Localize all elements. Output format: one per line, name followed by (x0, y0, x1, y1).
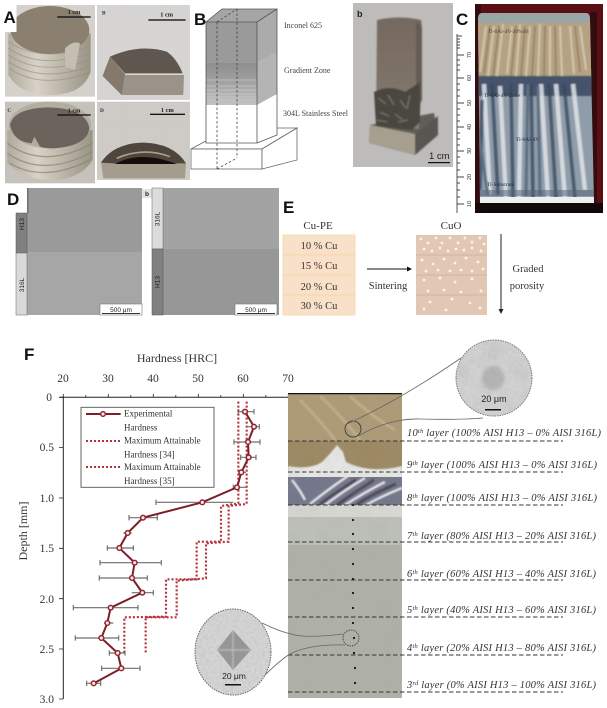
right micrograph: 316L (154, 211, 162, 226)
label: 10th layer: th (418, 428, 423, 435)
porous CuO stack (416, 235, 487, 315)
ruler: 50 (467, 100, 473, 106)
photo b: printed column on base: b (357, 9, 363, 19)
y axis: 0 (46, 392, 52, 404)
label: 5th layer: 5 (407, 605, 412, 616)
left micrograph (16, 188, 142, 315)
heading letter C: C (456, 10, 468, 29)
legend: Hardness (124, 423, 158, 433)
legend: Experimental (124, 408, 173, 418)
label: 6th layer: th (412, 569, 418, 576)
ruler: 60 (467, 75, 473, 81)
photo B: sectioned sample (97, 5, 190, 100)
label Graded porosity (510, 264, 545, 292)
y axis: 3.0 (40, 694, 54, 706)
stack of Cu-PE layers (283, 235, 355, 315)
y axis: 1.0 (40, 493, 54, 505)
ruler: 70 (467, 52, 473, 58)
sub-label b (142, 189, 152, 198)
label: 4th layer: th (412, 643, 418, 650)
callout: top indentation detail: 20 μm (481, 394, 507, 404)
x axis: 70 (282, 373, 294, 385)
x axis: 60 (237, 373, 249, 385)
label: 9th layer: layer (100% AISI H13 – 0% AISI 316L) (418, 460, 598, 471)
rough band (374, 82, 420, 130)
substrate base (191, 128, 297, 169)
ruler (457, 34, 473, 213)
photo D: section of cylinder: D (100, 108, 104, 114)
panel F heading letter: F (24, 345, 34, 364)
panel B: graded block schematic (191, 9, 349, 169)
legend: Hardness [35] (124, 476, 175, 486)
dotted line: maximum attainable hardness 35 (146, 402, 247, 653)
label: 3rd layer: rd (412, 680, 419, 687)
label: 9th layer: 9 (407, 460, 412, 471)
x axis: 20 (57, 373, 69, 385)
label: Inconel 625: Inconel 625 (284, 21, 322, 30)
experimental hardness curve (91, 409, 256, 686)
ruler: 10 (467, 201, 473, 207)
panel C: ruler and etched cross-section (456, 4, 603, 213)
label Cu-PE: Cu-PE (303, 220, 333, 232)
x axis: 30 (102, 373, 114, 385)
photo A: graded cylinder (5, 5, 95, 97)
left micrograph: 316L (19, 277, 26, 292)
right micrograph: H13 (154, 276, 162, 288)
x axis: 40 (147, 373, 159, 385)
label: 3rd layer: 3 (407, 680, 412, 691)
label: 3rd layer: layer (0% AISI H13 – 100% AISI 316L) (418, 680, 596, 691)
stack of Cu-PE layers: 10 % Cu (301, 241, 338, 252)
heading letter D: D (7, 190, 19, 209)
photo B: sectioned sample: B (102, 11, 106, 17)
heading letter B: B (194, 10, 206, 29)
etched sample photo (475, 4, 603, 213)
label: 8th layer: 8 (407, 493, 412, 504)
photo C: top view of cylinder (5, 102, 95, 183)
label Graded porosity: Graded (513, 264, 544, 275)
callout: top indentation detail (345, 340, 532, 437)
scale box: 500 μm (110, 307, 132, 314)
scale bar: 1 cm (68, 107, 81, 114)
photo b: printed column on base (353, 3, 453, 167)
heading letter D (6, 190, 22, 212)
y axis title: Depth [mm] (16, 502, 30, 560)
photo C: top view of cylinder: C (7, 108, 11, 114)
etched sample photo: Ti-6Al-4V (516, 137, 539, 143)
etched sample photo: Ti-6Al-4V-20%SS (488, 29, 529, 35)
stack of Cu-PE layers: 30 % Cu (301, 301, 338, 312)
panel D: micrographs of H13 and 316L (6, 188, 279, 315)
label Graded porosity: porosity (510, 281, 545, 292)
dashed layer boundaries (288, 441, 563, 692)
scale bar: 1 cm (68, 9, 81, 16)
ruler: 40 (467, 124, 473, 130)
legend: Maximum Attainable (124, 436, 201, 446)
block drawing (191, 9, 297, 169)
legend: Hardness [34] (124, 449, 175, 459)
etched sample photo: Ti-Substrate (487, 182, 515, 188)
column (376, 18, 422, 129)
arrow: sintering: Sintering (369, 281, 408, 292)
label: 7th layer: layer (80% AISI H13 – 20% AISI 316L) (418, 531, 596, 542)
panel A: four photographs of printed samples (5, 5, 190, 183)
label: 7th layer: th (412, 531, 418, 538)
label: 7th layer: 7 (407, 531, 412, 542)
indentation dots (352, 504, 356, 684)
label: 8th layer: layer (100% AISI H13 – 0% AISI 316L) (418, 493, 598, 504)
label CuO: CuO (441, 220, 461, 232)
scale box: 500 μm (245, 307, 267, 314)
callout: bottom indentation detail: 20 μm (222, 671, 246, 681)
panel F: hardness chart (16, 351, 294, 706)
legend: Maximum Attainable (124, 462, 201, 472)
label: 8th layer: th (412, 493, 418, 500)
label: 10th layer: layer (100% AISI H13 – 0% AISI 316L) (423, 428, 602, 439)
heading letter E: E (283, 198, 294, 217)
photo D: section of cylinder (97, 102, 190, 180)
scale bar: 1 cm (160, 12, 174, 19)
label: Gradient Zone: Gradient Zone (284, 66, 331, 75)
label: 5th layer: layer (40% AISI H13 – 60% AISI 316L) (418, 605, 596, 616)
x axis: 50 (192, 373, 204, 385)
y axis (40, 392, 63, 706)
label: 10th layer: 10 (407, 428, 418, 439)
label: 304L Stainless Steel: 304L Stainless Steel (283, 109, 349, 118)
x axis title: Hardness [HRC] (137, 351, 217, 365)
cross-section micrograph of layers (288, 393, 563, 698)
scale bar: 1 cm (161, 107, 174, 114)
ruler: 30 (467, 148, 473, 154)
stack of Cu-PE layers: 20 % Cu (301, 282, 338, 293)
ruler: 20 (467, 174, 473, 180)
label: 6th layer: 6 (407, 569, 412, 580)
label: 4th layer: 4 (407, 643, 412, 654)
y axis: 0.5 (40, 442, 54, 454)
error bars (73, 409, 260, 686)
label: 6th layer: layer (60% AISI H13 – 40% AISI 316L) (418, 569, 596, 580)
arrow: graded porosity (498, 234, 504, 314)
label: 4th layer: layer (20% AISI H13 – 80% AISI 316L) (418, 643, 596, 654)
panel E: graded porosity by sintering (283, 198, 545, 315)
x axis (57, 373, 294, 397)
etched sample photo: Ti-6Al-4V-Zone (484, 93, 521, 99)
y axis: 2.5 (40, 644, 54, 656)
label: 5th layer: th (412, 605, 418, 612)
right micrograph (152, 188, 279, 315)
callout: bottom indentation detail (195, 609, 359, 695)
dotted line: maximum attainable hardness 34 (124, 402, 238, 653)
panel letter A: A (4, 8, 16, 27)
sub-label b: b (145, 191, 149, 198)
arrow: sintering (367, 266, 412, 292)
scale bar 1 cm: 1 cm (429, 151, 450, 162)
legend (81, 407, 214, 487)
left micrograph: H13 (19, 218, 26, 230)
layer labels (406, 428, 602, 691)
base plate (369, 113, 438, 155)
panel letter A (0, 0, 16, 32)
stack of Cu-PE layers: 15 % Cu (301, 261, 338, 272)
label: 9th layer: th (412, 460, 418, 467)
y axis: 2.0 (40, 594, 54, 606)
y axis: 1.5 (40, 543, 54, 555)
